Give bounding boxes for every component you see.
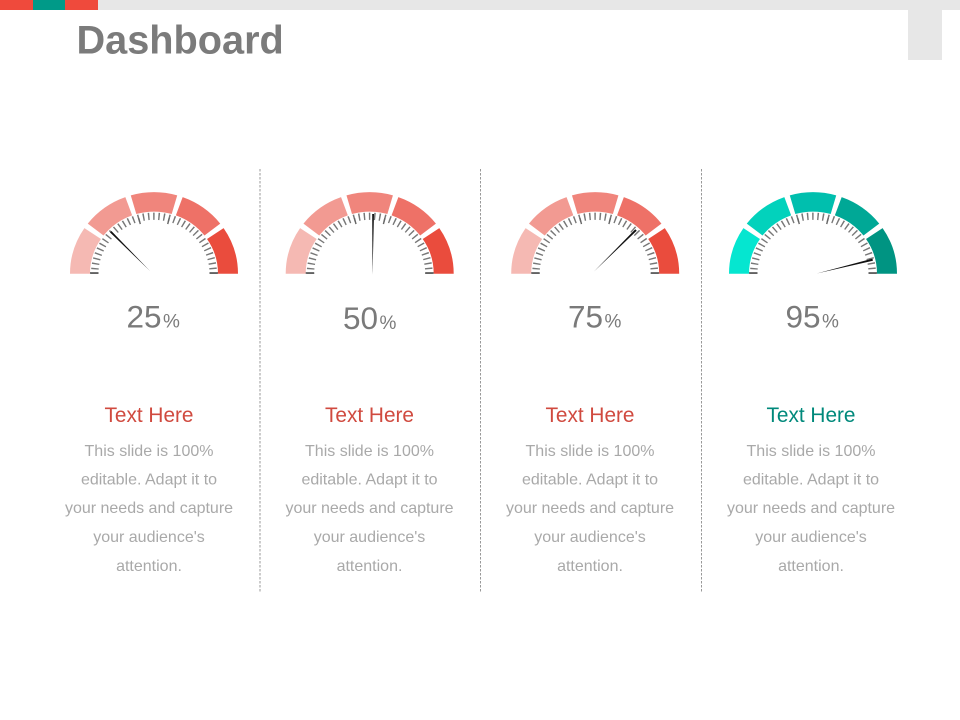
needle 4 [817,259,873,274]
panel: gauge 75% [506,202,674,575]
body text 3: your audience's [534,529,646,546]
body text 3: your needs and capture [506,500,674,517]
needle 2 [372,214,374,275]
heading 4: Text Here [766,404,856,427]
body text 3 [506,443,674,575]
top bar [0,0,960,10]
body text 2: your audience's [314,529,425,546]
corner tab [908,10,942,60]
panel: gauge 50% [285,202,454,575]
heading 3: Text Here [546,404,634,427]
body text 1 [65,443,233,575]
body text 4: your audience's [755,529,867,546]
body text 3: This slide is 100% [526,443,654,460]
body text 1: attention. [116,558,182,575]
gauge dial 4 [739,202,887,274]
body text 1: editable. Adapt it to [81,472,217,488]
panel: gauge 25% [65,202,233,575]
body text 1: your needs and capture [65,500,233,517]
heading 1: Text Here [104,404,194,427]
heading 2: Text Here [325,404,414,427]
value 25%: 25% [126,299,180,335]
body text 2: attention. [337,558,402,575]
value 50%: 50% [343,300,397,336]
body text 4: your needs and capture [727,500,895,517]
gauge dial 2 [296,202,444,274]
body text 1: your audience's [93,529,205,546]
body text 4 [727,443,895,575]
body text 4: This slide is 100% [747,443,875,460]
body text 4: attention. [778,558,844,575]
body text 2 [285,443,454,575]
body text 2: your needs and capture [285,500,454,517]
gauge dial 1 [80,202,228,274]
body text 2: This slide is 100% [305,443,434,460]
gauge dial 3 [521,202,669,274]
body text 2: editable. Adapt it to [301,472,438,488]
value 95%: 95% [786,299,839,335]
body text 3: attention. [557,558,623,575]
body text 3: editable. Adapt it to [522,472,658,488]
body text 4: editable. Adapt it to [743,472,879,488]
value 75%: 75% [568,299,622,335]
needle 1 [110,231,150,271]
panel: gauge 95% [727,202,895,575]
title: Dashboard [76,18,284,62]
needle 3 [594,229,637,272]
body text 1: This slide is 100% [85,443,213,460]
